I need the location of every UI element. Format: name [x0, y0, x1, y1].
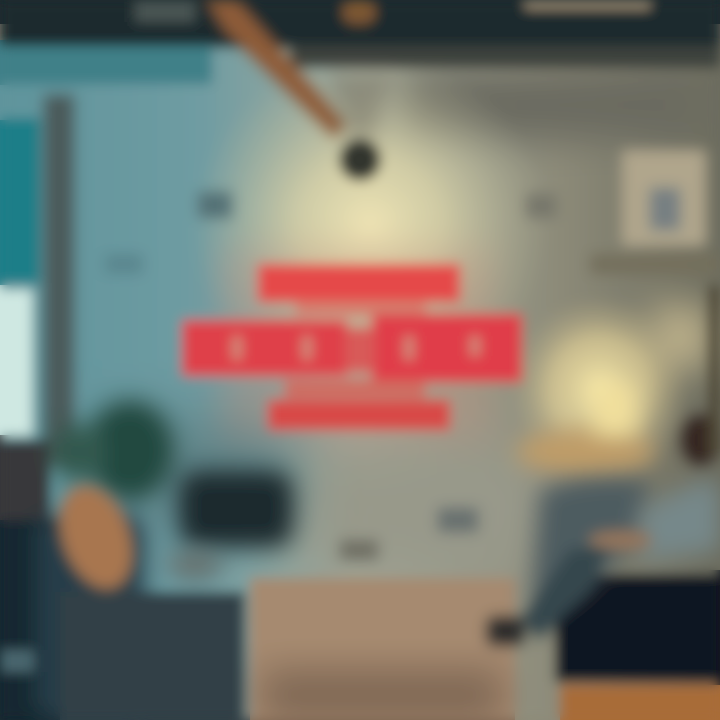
left window: [0, 95, 74, 530]
ceiling: [0, 0, 720, 84]
right wall picture and shelf: [590, 150, 720, 370]
dark side sofa: [178, 470, 294, 548]
pendant lamp: [325, 72, 392, 181]
table lamp glow: [510, 295, 690, 485]
floor: [250, 578, 720, 720]
wall frames: [105, 192, 556, 560]
red wall lettering: [182, 250, 522, 440]
armchair: [0, 476, 245, 720]
plant: [50, 400, 174, 500]
seated person on sofa: [487, 285, 720, 682]
wooden beam: [205, 0, 346, 138]
